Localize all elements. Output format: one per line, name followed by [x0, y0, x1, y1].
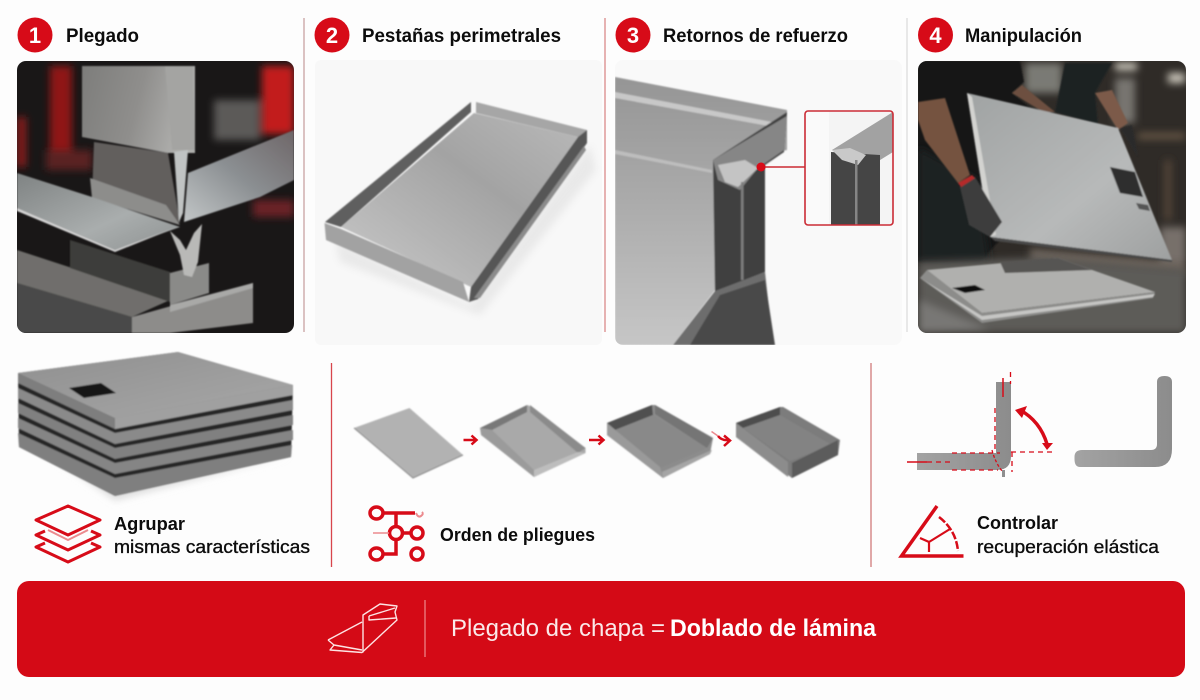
illustration: tray with three flanges [607, 405, 713, 478]
heading: 3 Retornos de refuerzo [616, 18, 848, 52]
text: Controlar recuperación elástica: recuperación elástica [977, 537, 1160, 557]
heading: 2 Pestañas perimetrales: Pestañas perimetrales [362, 26, 561, 47]
text: banner sentence: Doblado de lámina [670, 615, 877, 642]
arrow: step 1 to 2 [464, 436, 476, 444]
text: Agrupar mismas características: mismas características [114, 537, 310, 557]
arrow: step 2 to 3 [589, 436, 604, 444]
photo: tray with perimeter flanges [315, 60, 602, 345]
callout: zoomed detail of the return [756, 111, 893, 225]
heading: 2 Pestañas perimetrales: 2 [326, 23, 338, 48]
diagram: bend with angle marks [907, 372, 1053, 477]
text: Agrupar mismas características [114, 514, 310, 557]
text: Orden de pliegues: Orden de pliegues [440, 525, 595, 545]
heading: 4 Manipulación: 4 [929, 23, 942, 48]
text: Controlar recuperación elástica: Controlar [977, 513, 1058, 533]
icon: fold sequence tree [370, 507, 423, 560]
icon: folded sheet [328, 604, 397, 652]
illustration: flat sheet step [354, 408, 463, 478]
heading: 4 Manipulación: Manipulación [965, 26, 1082, 47]
photo: worker handling a panel [918, 61, 1186, 333]
illustration: stack of panels [18, 352, 293, 500]
illustration: finished box [736, 407, 840, 478]
banner: definition [17, 581, 1185, 677]
heading: 1 Plegado: 1 [29, 23, 41, 48]
text: Agrupar mismas características: Agrupar [114, 514, 185, 534]
icon: stacked layers [36, 506, 100, 562]
heading: 1 Plegado [18, 18, 139, 52]
arrow: step 3 to 4 [712, 432, 730, 446]
heading: 4 Manipulación [918, 18, 1082, 52]
diagram: finished rounded bend [1074, 376, 1172, 467]
photo: press brake bending a sheet [17, 61, 294, 333]
photo: reinforcement return corner [615, 76, 788, 345]
illustration: tray with two flanges [480, 405, 586, 477]
text: banner sentence: Plegado de chapa = [451, 615, 665, 642]
heading: 2 Pestañas perimetrales [314, 18, 561, 52]
text: Controlar recuperación elástica [977, 513, 1160, 557]
heading: 1 Plegado: Plegado [66, 26, 139, 47]
icon: springback angle [902, 506, 964, 556]
heading: 3 Retornos de refuerzo: Retornos de refuerzo [663, 26, 848, 47]
heading: 3 Retornos de refuerzo: 3 [627, 23, 639, 48]
